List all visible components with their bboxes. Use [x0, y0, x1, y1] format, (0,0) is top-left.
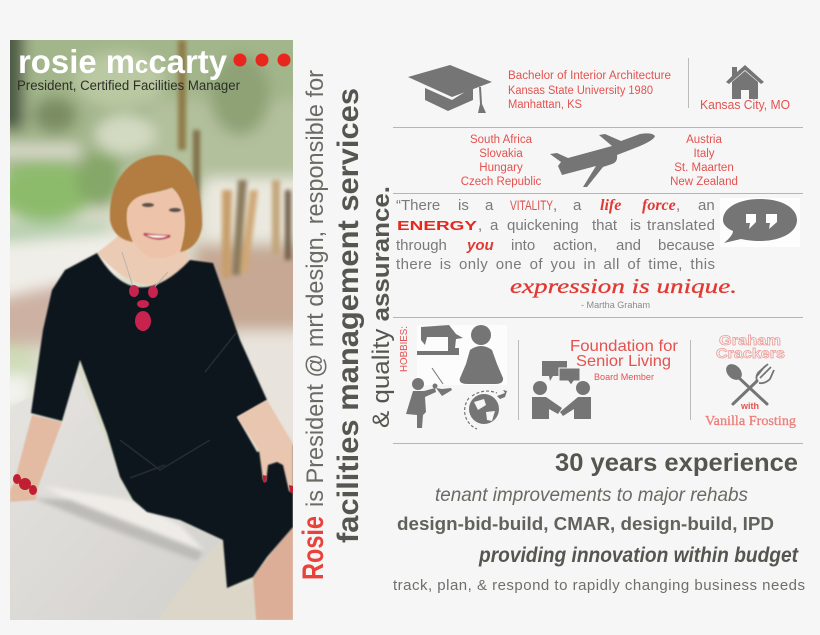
- countries right: St. Maarten: [674, 162, 734, 174]
- icon: spoon and fork: [723, 361, 774, 404]
- countries left: Slovakia: [479, 148, 523, 160]
- quote line 1: life: [600, 197, 621, 214]
- graham crackers text: Crackers: [716, 345, 785, 361]
- hair: [110, 155, 202, 252]
- quote line 1: ,: [676, 197, 680, 214]
- quote line 2: that: [592, 217, 618, 234]
- quote line 1: ,: [553, 197, 557, 214]
- quote line 3: and: [616, 237, 641, 254]
- photo tree trunks: [178, 40, 291, 278]
- hobbies icons: [406, 325, 507, 429]
- delivery methods line: design-bid-build, CMAR, design-build, IPD: [397, 513, 774, 534]
- experience heading: 30 years experience: [555, 449, 798, 477]
- quote ending: expression is unique.: [510, 274, 737, 298]
- icon: speech bubble: [720, 198, 800, 247]
- icon: airplane: [550, 133, 655, 187]
- countries right: Austria: [686, 134, 722, 146]
- face: [127, 188, 185, 258]
- quote line 1: a: [485, 197, 494, 214]
- fingernails: [263, 475, 293, 494]
- countries left: Hungary: [479, 162, 523, 174]
- countries left: [461, 134, 542, 188]
- left arm: [10, 415, 62, 502]
- right forearm and hand: [237, 400, 293, 493]
- quote line 1: is: [458, 197, 469, 214]
- quote line 1: an: [698, 197, 715, 214]
- quote line 3: you: [466, 237, 494, 254]
- icon: house: [726, 65, 764, 99]
- icon: graduation cap: [408, 65, 492, 113]
- location text: Kansas City, MO: [700, 97, 790, 112]
- job subtitle: President, Certified Facilities Manager: [17, 78, 240, 93]
- rule: [393, 193, 803, 194]
- board member text: Board Member: [594, 372, 654, 383]
- innovation line: providing innovation within budget: [478, 544, 799, 567]
- quote line 2: translated: [647, 217, 715, 234]
- education text: [508, 70, 671, 111]
- countries right: New Zealand: [670, 176, 738, 188]
- divider: [690, 340, 691, 420]
- quote line 2: is: [630, 217, 641, 234]
- countries right: Italy: [693, 148, 715, 160]
- bracelet: [13, 474, 37, 495]
- rule: [393, 317, 803, 318]
- black dress: [31, 253, 293, 588]
- graham crackers text: Graham: [719, 332, 781, 348]
- vertical assurance line: & quality assurance.: [368, 186, 395, 428]
- quote line 2: ENERGY: [397, 218, 477, 233]
- graham crackers text: [716, 332, 785, 361]
- icon: sewing machine: [417, 325, 463, 355]
- neck and chest: [97, 225, 190, 285]
- education text: Kansas State University 1980: [508, 85, 653, 97]
- dress folds: [120, 333, 236, 478]
- white backing: [417, 325, 507, 385]
- countries left: South Africa: [470, 134, 533, 146]
- leg: [253, 525, 293, 620]
- panel: portrait photo: [10, 40, 293, 620]
- necklace: [122, 252, 168, 331]
- countries left: Czech Republic: [461, 176, 542, 188]
- hobbies label: HOBBIES:: [399, 326, 410, 372]
- vertical intro line: is President @ mrt design, responsible for: [302, 70, 329, 507]
- education text: Bachelor of Interior Architecture: [508, 70, 671, 82]
- quote line 1: [396, 197, 715, 214]
- vertical name Rosie: Rosie: [297, 516, 330, 580]
- icon: board members handshake: [532, 361, 591, 419]
- foundation heading: Foundation for: [570, 338, 679, 355]
- divider: [518, 340, 519, 420]
- photo background garden: [10, 40, 293, 620]
- quote line 1: VITALITY: [510, 197, 553, 213]
- divider: [688, 58, 689, 108]
- countries right: [670, 134, 738, 188]
- rule: [393, 127, 803, 128]
- facial features: [142, 203, 181, 239]
- quote line 2: ,: [478, 217, 482, 234]
- quote line 3: because: [658, 237, 715, 254]
- icon: meditating person: [460, 325, 503, 384]
- quote line 2: quickening: [507, 217, 579, 234]
- foundation heading: Senior Living: [576, 353, 671, 370]
- quote line 3: [396, 237, 715, 254]
- quote line 1: “There: [396, 197, 440, 214]
- concrete ledge: [10, 374, 206, 620]
- education text: Manhattan, KS: [508, 99, 582, 111]
- foundation heading: [570, 338, 679, 370]
- quote block: [396, 197, 715, 273]
- vanilla frosting text: Vanilla Frosting: [705, 413, 796, 428]
- quote line 1: a: [573, 197, 582, 214]
- quote line 1: force: [642, 197, 676, 214]
- quote line 4: there is only one of you in all of time, this: [396, 256, 715, 273]
- rule: [393, 443, 803, 444]
- quote line 2: [397, 217, 715, 234]
- icon: child on swing: [406, 368, 452, 428]
- name title: rosie mccarty: [18, 43, 228, 80]
- tenant line: tenant improvements to major rehabs: [435, 485, 748, 506]
- quote line 3: into: [511, 237, 535, 254]
- quote line 2: a: [490, 217, 499, 234]
- quote attribution: - Martha Graham: [581, 300, 650, 311]
- quote line 3: action,: [553, 237, 597, 254]
- icon: globe with plane: [465, 390, 507, 429]
- quote line 3: through: [396, 237, 447, 254]
- red dots: [234, 54, 290, 66]
- business needs line: track, plan, & respond to rapidly changing business needs: [393, 577, 805, 594]
- with text: with: [740, 401, 759, 411]
- vertical bold line: facilities management services: [332, 88, 365, 543]
